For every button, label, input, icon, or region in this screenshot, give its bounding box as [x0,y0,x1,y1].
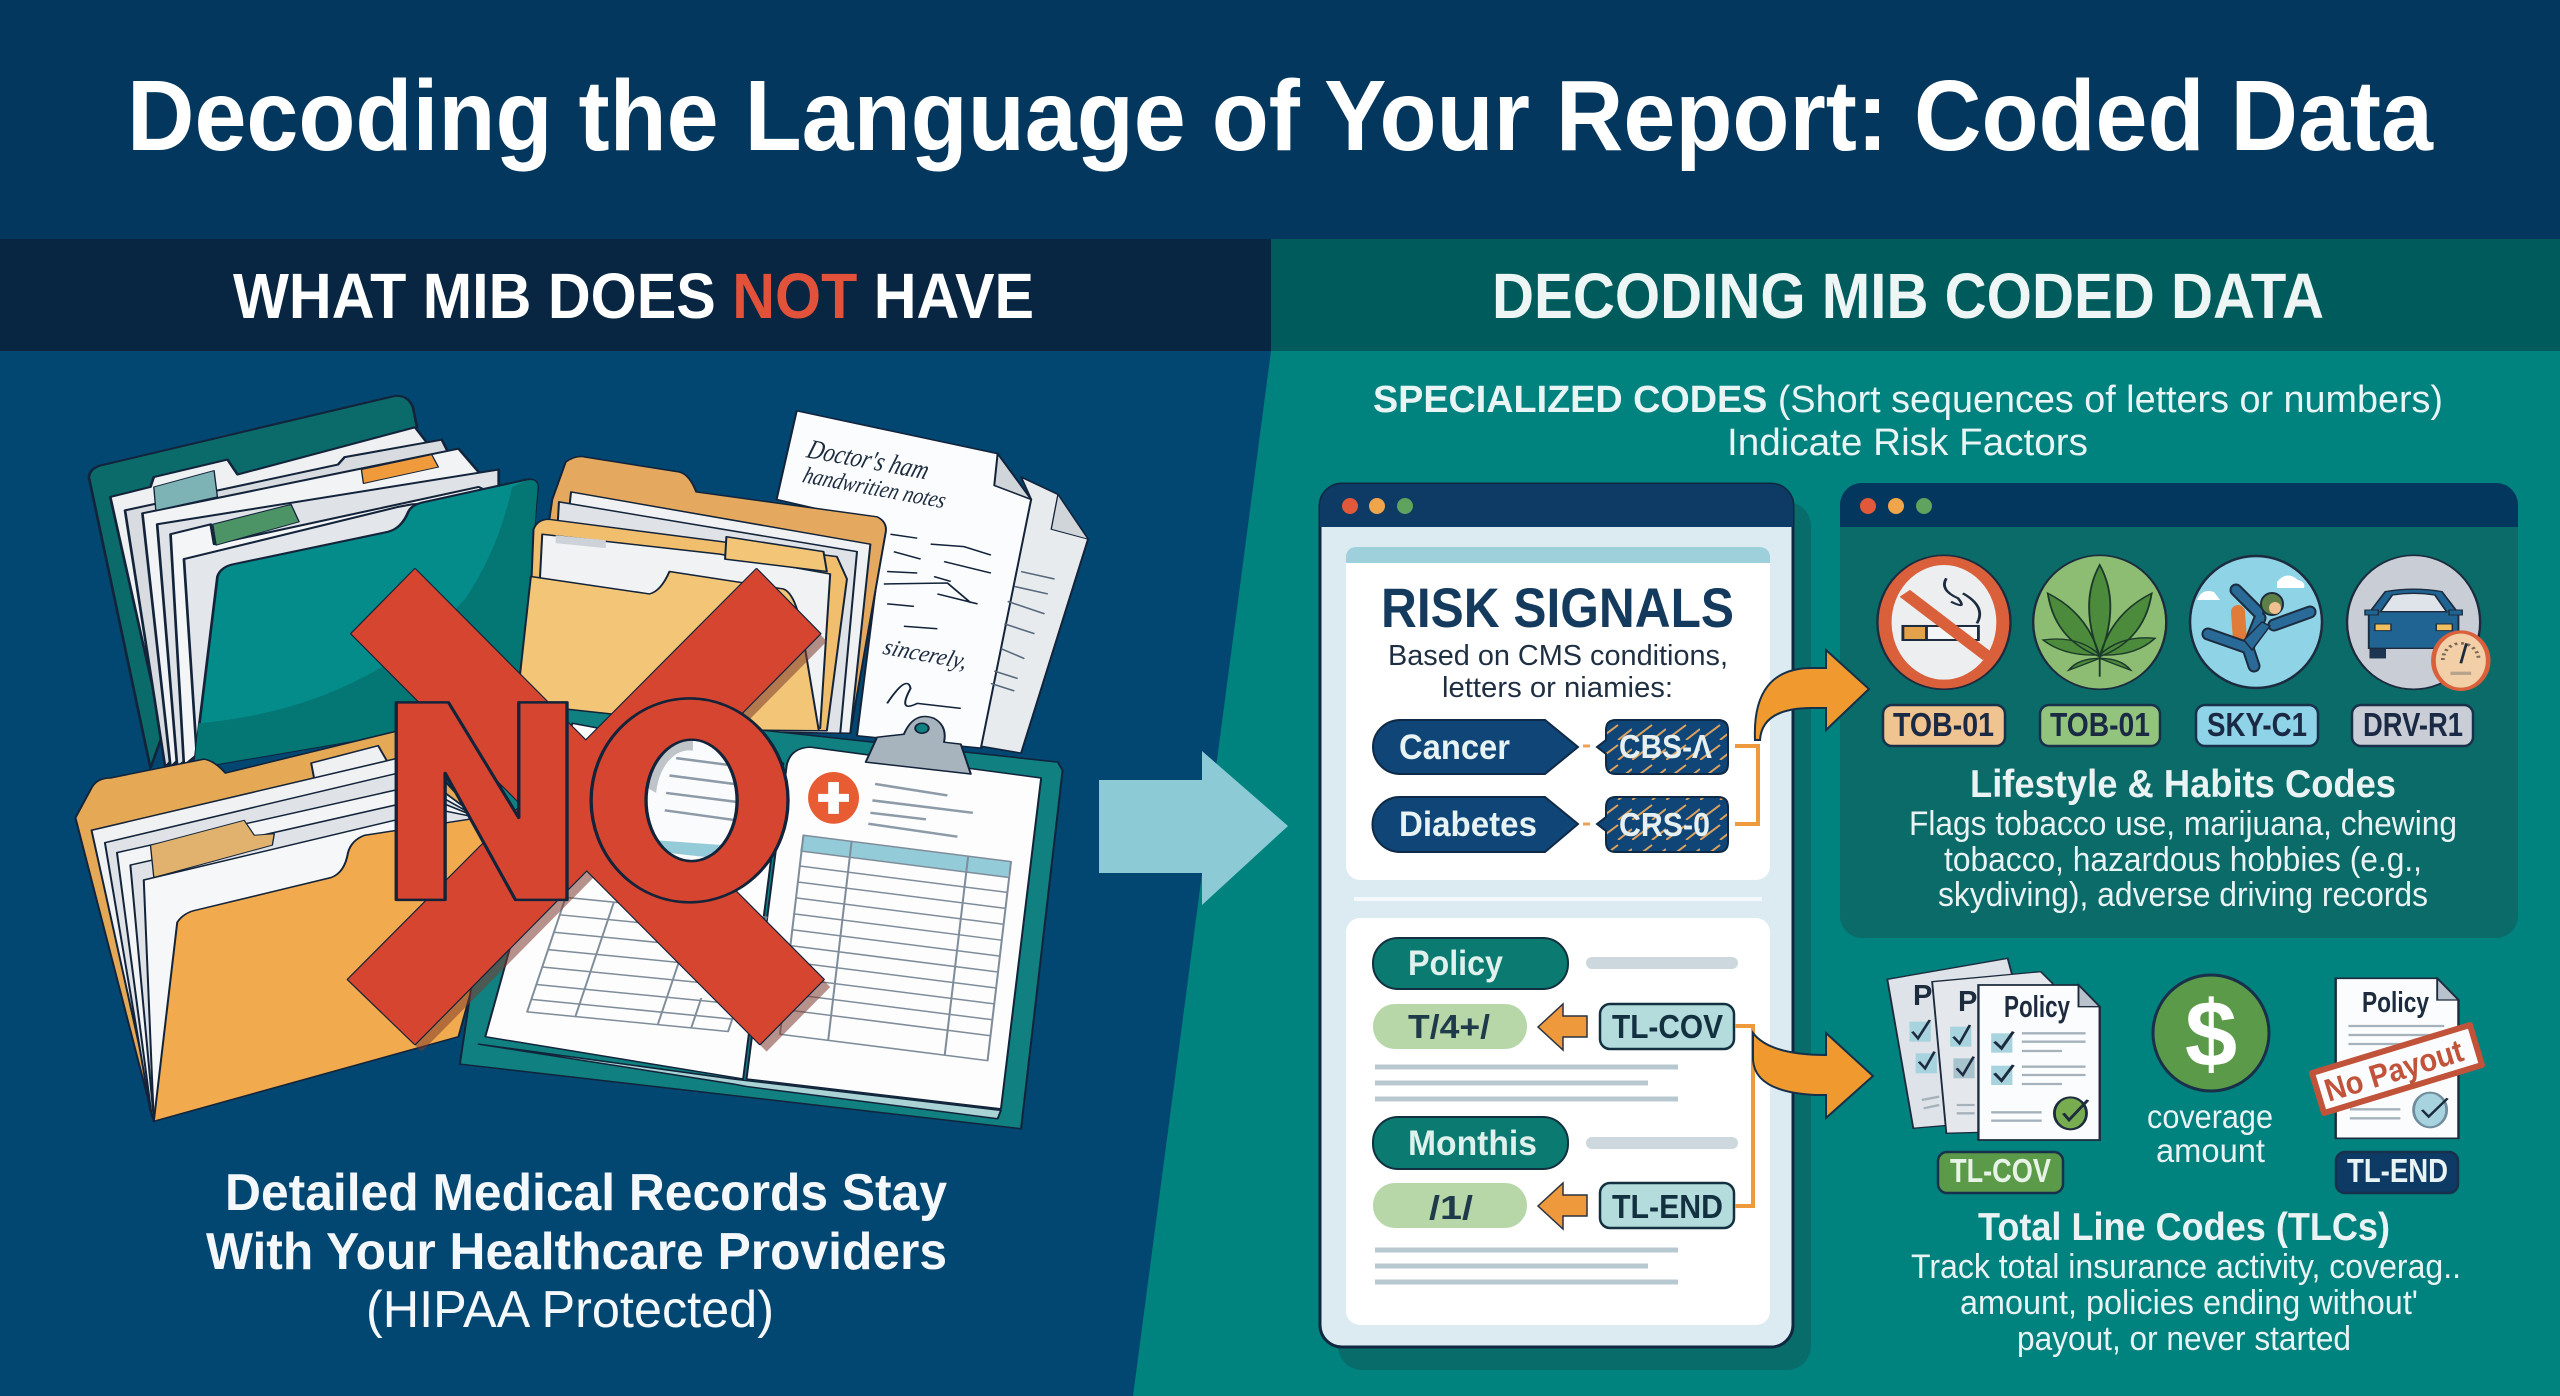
card: risk signals: RISK SIGNALS [1381,576,1734,639]
label: coverage amount: amount [2156,1132,2265,1169]
icon: handwritten doctor's note [777,411,1088,753]
card: policy codes: Policy [1408,944,1503,983]
card: risk signals: letters or niamies: [1442,672,1673,704]
code labels: SKY-C1 [2207,706,2307,743]
card: risk signals: CRS-0 [1619,806,1710,843]
arrow: left to right [1099,751,1288,905]
icon: handwritten doctor's note: Doctor's ham [802,434,933,486]
label: coverage amount: coverage [2147,1098,2273,1135]
header: right [1271,239,2560,351]
total line codes heading and text: payout, or never started [2017,1320,2351,1358]
title: Decoding the Language of Your Report: Coded Data [127,60,2434,172]
code labels: TOB-01 [2050,706,2150,743]
lifestyle heading and text: skydiving), adverse driving records [1938,876,2428,914]
arrow: risk signals to lifestyle codes [1755,650,1869,740]
subheading: specialized codes [1373,379,2443,464]
background: right panel [1133,351,2560,1396]
label: coverage amount [2147,1098,2273,1169]
NO lettering [396,698,788,902]
icon: car with speedometer [2347,555,2488,689]
header: right: DECODING MIB CODED DATA [1492,260,2324,332]
paper seen through the O [645,739,738,862]
caption: medical records: Detailed Medical Records Stay [225,1164,947,1222]
icon: dollar coin [2153,975,2269,1091]
background: left panel [0,351,1272,1396]
total line codes heading and text: amount, policies ending without' [1960,1284,2418,1322]
icon: orange folder upper [519,456,886,733]
card: policy codes [1346,918,1770,1325]
icon: policy documents stack: P [1913,980,1932,1012]
icon: policy with no payout stamp: Policy [2362,987,2429,1019]
lifestyle heading and text: tobacco, hazardous hobbies (e.g., [1944,841,2422,879]
icon: dollar coin: $ [2185,981,2237,1086]
card: risk signals: Based on CMS conditions, [1388,640,1728,672]
code labels: TOB-01 [1893,706,1994,743]
code labels [1883,705,2473,746]
panel: risk signals window [1320,484,1811,1370]
icon: clipboard with open records [460,703,1063,1129]
header: left [0,239,1271,351]
card: risk signals: CBS-Λ [1619,728,1712,765]
card: risk signals: Cancer [1399,728,1510,767]
panel: lifestyle and habits codes [1840,483,2518,938]
code labels: DRV-R1 [2363,706,2463,743]
icon: orange folder lower [75,731,519,1121]
icon: policy with no payout stamp [2312,978,2482,1138]
title band [0,0,2560,239]
panel: total line codes [1887,958,2482,1358]
icon: handwritten doctor's note: handwritien notes [799,463,949,514]
card: risk signals [1346,547,1770,880]
icon: no smoking [1877,555,2011,689]
card: policy codes: TL-COV [1612,1008,1723,1045]
card: policy codes: Monthis [1408,1124,1537,1163]
lifestyle heading and text: Flags tobacco use, marijuana, chewing [1909,805,2457,843]
lifestyle heading and text: Lifestyle & Habits Codes [1970,763,2396,806]
total line codes heading and text: Total Line Codes (TLCs) [1978,1206,2390,1249]
total line codes heading and text: Track total insurance activity, coverag.. [1911,1248,2461,1286]
icon: skydiver [2190,556,2322,688]
label: TL-END: TL-END [2347,1152,2448,1189]
lifestyle heading and text [1909,763,2457,914]
arrow: policy codes to total line codes [1753,1033,1873,1118]
subheading: specialized codes: Indicate Risk Factors [1727,422,2088,464]
header: left: WHAT MIB DOES NOT HAVE [233,260,1034,332]
total line codes heading and text [1911,1206,2461,1358]
card: policy codes: TL-END [1612,1188,1723,1225]
subheading: specialized codes: SPECIALIZED CODES (Short sequences of letters or numbers) [1373,379,2443,421]
icon: cannabis leaf [2033,555,2166,689]
icon: red X [348,569,830,1052]
icon: policy documents stack: P [1958,986,1977,1018]
icon: policy with no payout stamp: No Payout [2320,1032,2468,1109]
caption: medical records [206,1164,947,1339]
card: policy codes: /1/ [1429,1189,1473,1226]
card: risk signals: Diabetes [1399,805,1537,844]
caption: medical records: (HIPAA Protected) [366,1281,774,1339]
icon: teal folder [89,396,538,768]
caption: medical records: With Your Healthcare Providers [206,1223,947,1281]
illustration: medical records crossed out [75,396,1088,1129]
icon: policy documents stack [1887,958,2100,1140]
icon: handwritten doctor's note: sincerely, [880,635,971,675]
icon: policy documents stack: Policy [2004,989,2071,1024]
label: TL-COV: TL-COV [1950,1152,2051,1189]
card: policy codes: T/4+/ [1408,1008,1490,1045]
